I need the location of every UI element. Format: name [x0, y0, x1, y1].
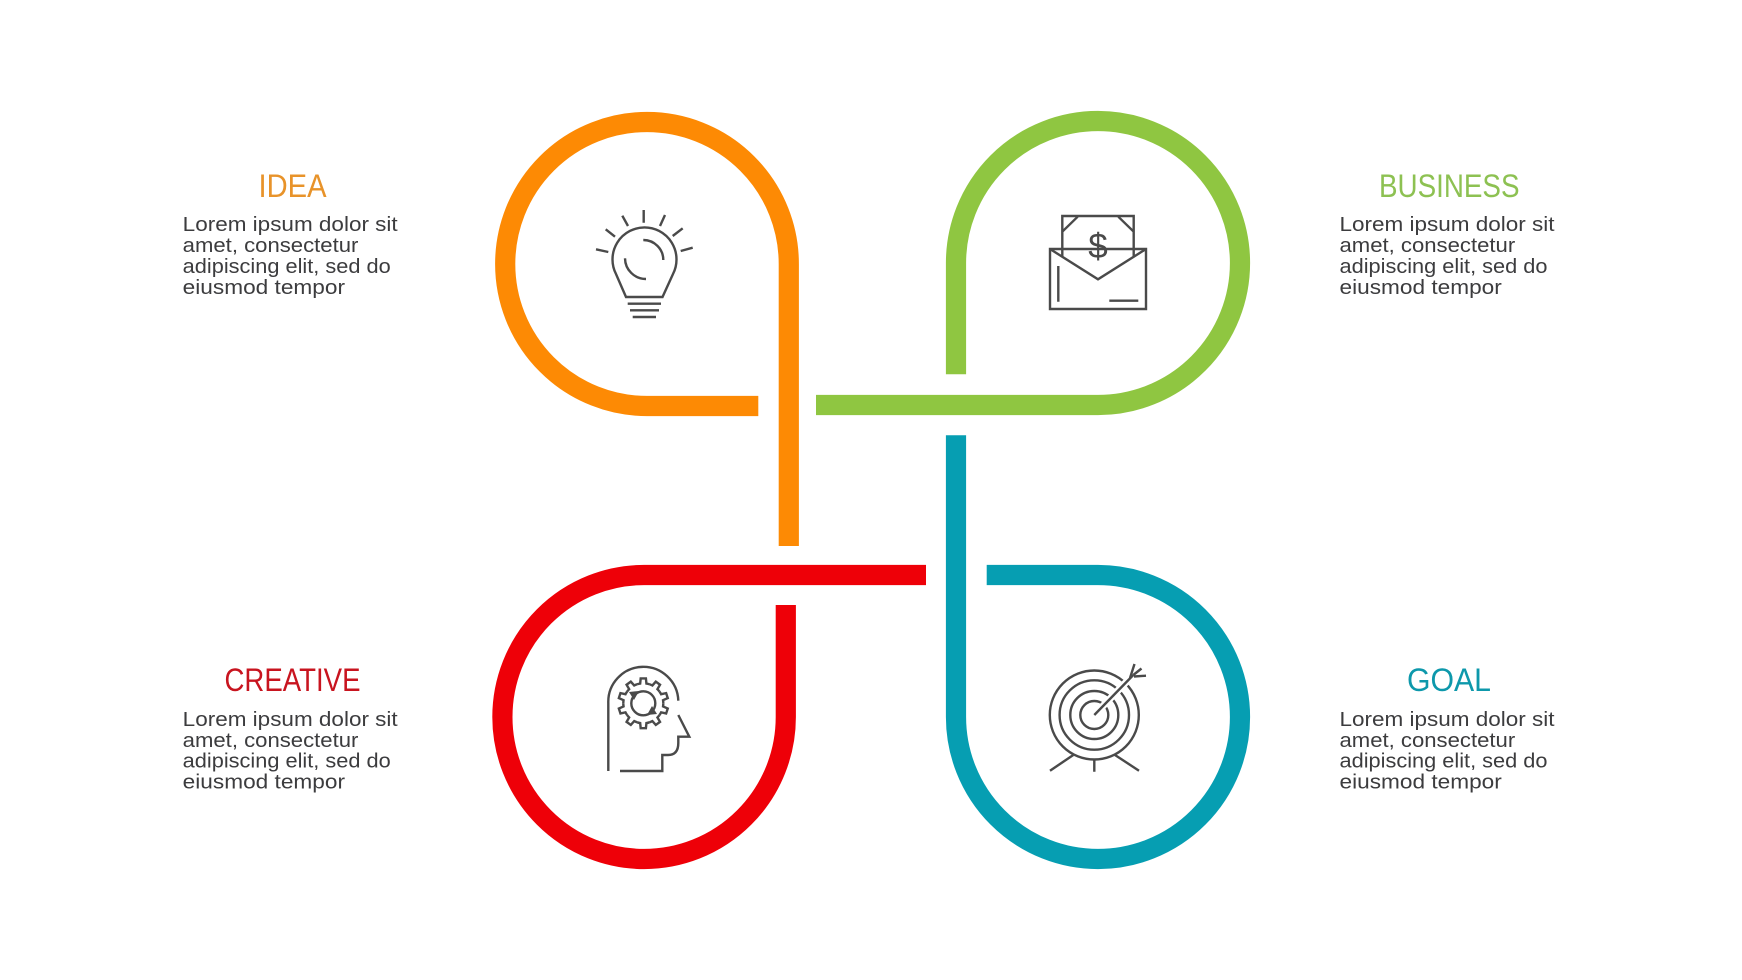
- red loop: creative: [502, 575, 926, 859]
- body text: goal: amet, consectetur: [1340, 729, 1515, 752]
- body text: idea: Lorem ipsum dolor sit: [183, 213, 398, 236]
- heading: creative: CREATIVE: [224, 662, 360, 698]
- icon: head with gear: [608, 667, 689, 771]
- icon: target with arrow: [1050, 664, 1146, 772]
- body text: idea: [183, 213, 398, 299]
- heading: goal: GOAL: [1407, 662, 1491, 698]
- body text: business: Lorem ipsum dolor sit: [1340, 213, 1555, 236]
- body text: idea: adipiscing elit, sed do: [183, 255, 391, 278]
- body text: creative: amet, consectetur: [183, 729, 359, 752]
- body text: idea: eiusmod tempor: [183, 276, 345, 299]
- icon: envelope with dollar note: [1050, 216, 1146, 309]
- body text: creative: adipiscing elit, sed do: [183, 750, 391, 772]
- icon: light bulb: [596, 210, 693, 317]
- body text: goal: eiusmod tempor: [1340, 770, 1502, 794]
- teal loop: goal: [956, 435, 1240, 859]
- body text: business: amet, consectetur: [1340, 234, 1515, 257]
- body text: idea: amet, consectetur: [183, 234, 359, 257]
- text block: business: [1340, 168, 1555, 299]
- body text: business: [1340, 213, 1555, 299]
- icon: envelope with dollar note: $: [1088, 227, 1108, 266]
- orange loop: idea: [505, 122, 789, 546]
- body text: goal: [1340, 708, 1555, 794]
- heading: business: BUSINESS: [1379, 168, 1520, 204]
- body text: business: eiusmod tempor: [1340, 276, 1502, 299]
- text block: creative: [183, 662, 398, 794]
- text block: idea: [183, 168, 398, 299]
- body text: creative: eiusmod tempor: [183, 770, 345, 794]
- text block: goal: [1340, 662, 1555, 794]
- green loop: business: [816, 121, 1240, 405]
- body text: goal: Lorem ipsum dolor sit: [1340, 708, 1555, 731]
- heading: idea: IDEA: [258, 168, 327, 204]
- body text: goal: adipiscing elit, sed do: [1340, 750, 1548, 772]
- body text: creative: [183, 708, 398, 794]
- body text: creative: Lorem ipsum dolor sit: [183, 708, 398, 731]
- body text: business: adipiscing elit, sed do: [1340, 255, 1548, 278]
